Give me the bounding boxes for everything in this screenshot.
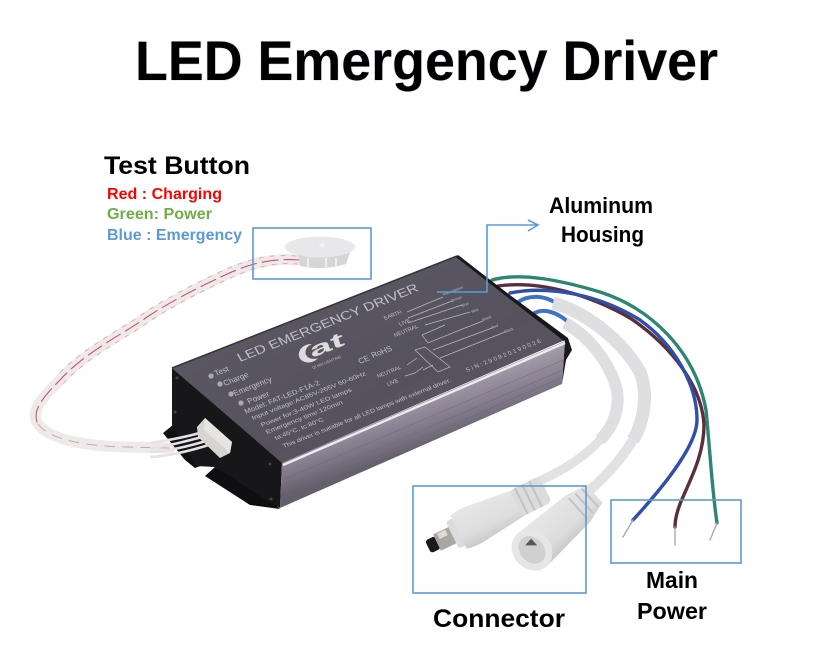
title: LED Emergency Driver <box>135 29 718 92</box>
printed label: Input voltage:AC85V-265V 50-60Hz <box>251 371 367 422</box>
printed label: Emergency <box>231 375 274 398</box>
wiring schematic <box>405 297 505 376</box>
printed label: Test <box>212 364 231 378</box>
printed label: Brown <box>451 295 462 303</box>
printed label: at <box>307 328 348 363</box>
white cables <box>518 297 644 490</box>
callout box: main power <box>611 500 741 563</box>
printed label: LIVE <box>386 378 400 388</box>
legend: green: Green: Power <box>107 206 212 223</box>
printed label: Black <box>504 327 514 334</box>
flat ribbon cable <box>35 256 300 448</box>
mounting tabs <box>163 425 222 468</box>
label: aluminum housing: Aluminum <box>549 193 653 218</box>
printed label: RoHS <box>369 344 394 360</box>
female DC connector <box>503 477 609 579</box>
printed label: EARTH <box>383 310 403 322</box>
printed label: NEUTRAL <box>376 365 403 380</box>
driver enclosure <box>150 256 572 509</box>
white wire connector <box>150 418 232 458</box>
label: main power <box>637 567 707 624</box>
legend: blue: Blue : Emergency <box>107 227 242 244</box>
printed label: Red <box>471 308 479 314</box>
top face <box>172 256 565 463</box>
label: connector: Connector <box>433 605 565 633</box>
printed label: LED EMERGENCY DRIVER <box>234 281 421 365</box>
printed label: NEUTRAL <box>393 324 420 339</box>
printed label: Charge <box>221 370 251 388</box>
printed label: This driver is suitable for all LED lamps with external driver. <box>282 378 453 450</box>
arrow: aluminum housing <box>437 220 538 292</box>
test button disc <box>285 236 355 268</box>
label: test button: Test Button <box>104 152 250 180</box>
printed label: Black <box>482 315 492 322</box>
right cap <box>457 256 572 384</box>
printed label: Emergency time:120min <box>265 400 344 436</box>
printed label: CE <box>356 354 371 366</box>
printed label: Model: FAT-LED-F1A-2 <box>243 380 322 416</box>
printed label: Red <box>491 324 499 330</box>
output wires: green, brown, blue <box>492 277 717 545</box>
callout box: test button <box>253 228 371 279</box>
printed label <box>208 281 543 450</box>
label: main power: Main <box>646 567 698 593</box>
side face <box>280 341 565 508</box>
printed label: ta:45°C, tc:80°C <box>274 417 326 442</box>
label: aluminum housing <box>549 193 653 247</box>
printed label: QI MIX LIGHTING <box>311 355 342 370</box>
printed label: Blue <box>461 301 469 308</box>
label: main power: Power <box>637 598 707 624</box>
end cap <box>172 368 282 508</box>
male DC connector <box>419 472 555 565</box>
printed label: Power <box>245 389 271 406</box>
printed label: S/N:290920190026 <box>465 339 543 374</box>
legend: red: Red : Charging <box>107 186 222 203</box>
printed label: Power for:3-40W LED lamps <box>260 388 353 429</box>
label: aluminum housing: Housing <box>561 222 644 247</box>
printed label: Yellow/green <box>442 285 464 297</box>
printed label: LIVE <box>398 318 412 328</box>
callout box: connector <box>413 486 586 593</box>
